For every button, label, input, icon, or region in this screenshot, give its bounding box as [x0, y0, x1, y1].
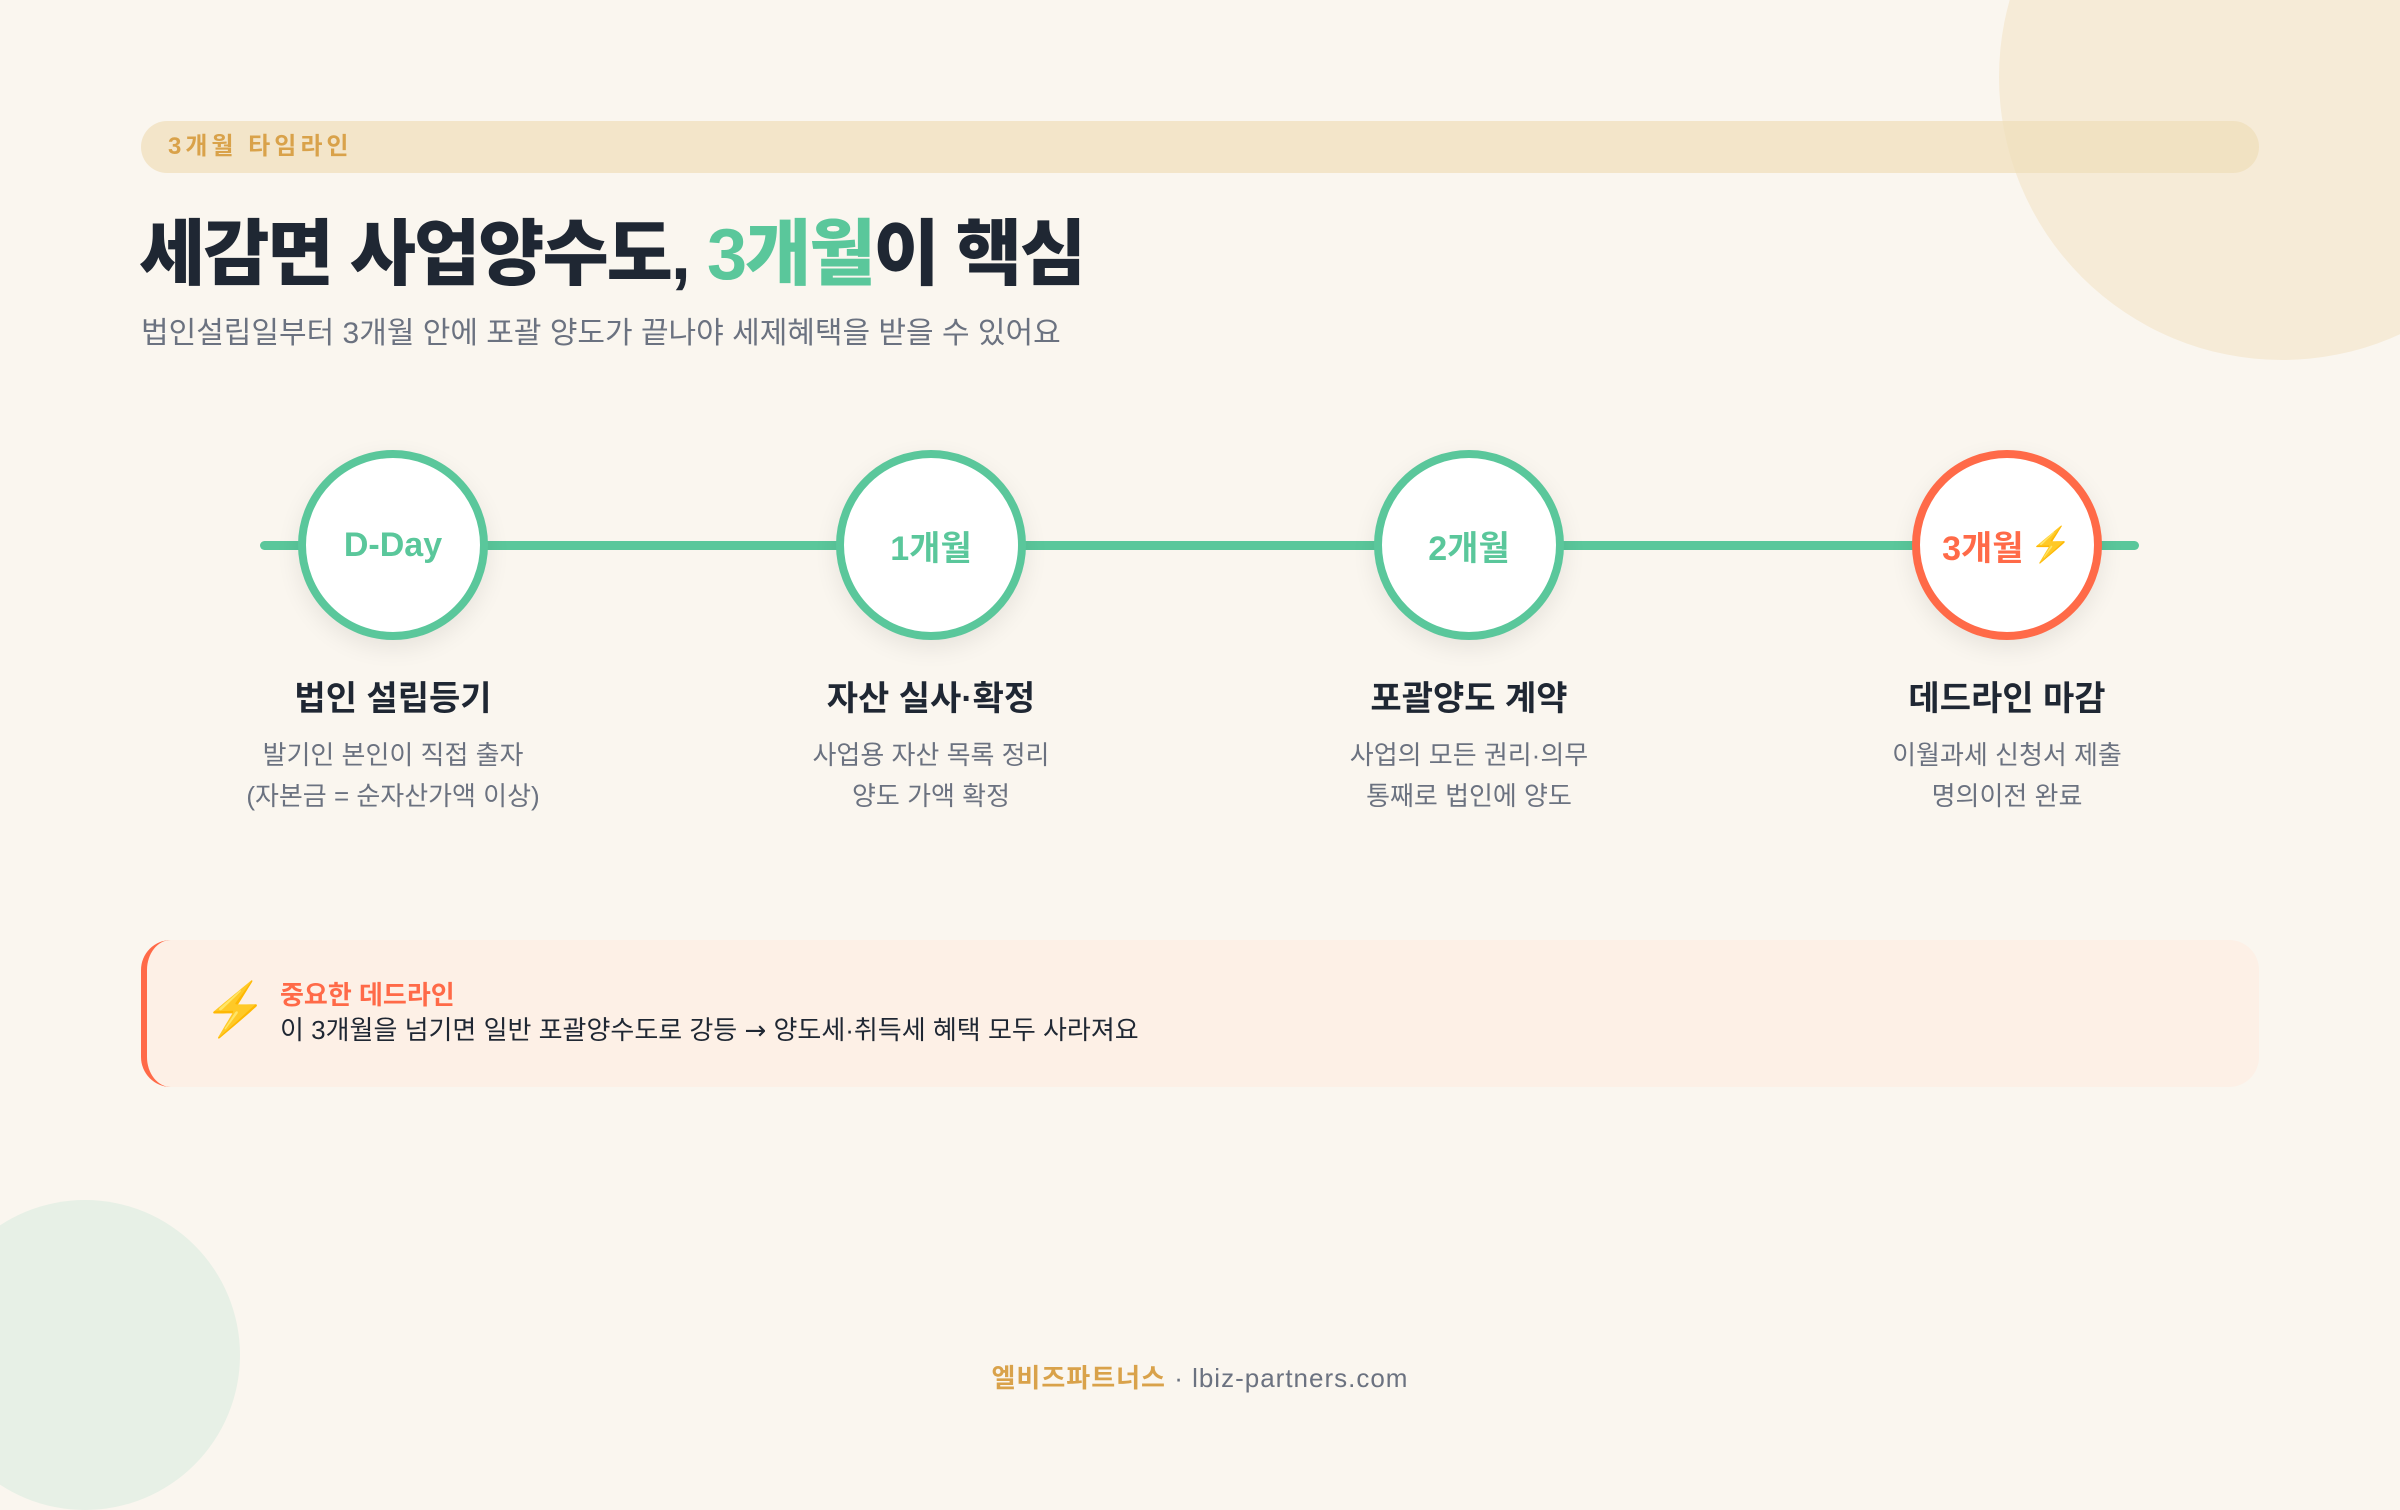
step: 1개월: 1개월	[890, 530, 972, 568]
label: 포괄양도 계약: 통째로 법인에 양도	[1366, 781, 1572, 811]
footer: 엘비즈파트너스 · lbiz-partners.com	[992, 1363, 1408, 1393]
step: 1개월	[836, 450, 1026, 640]
tag bar	[141, 121, 2259, 173]
label: 데드라인 마감	[1892, 680, 2122, 811]
callout text: 중요한 데드라인	[280, 980, 455, 1010]
callout	[141, 940, 2259, 1087]
label: 법인 설립등기: (자본금 = 순자산가액 이상)	[246, 781, 540, 811]
step: 3개월: ⚡	[2030, 526, 2072, 564]
subtitle: 법인설립일부터 3개월 안에 포괄 양도가 끝나야 세제혜택을 받을 수 있어요	[141, 317, 1061, 350]
label: 자산 실사·확정	[813, 680, 1049, 811]
label: 자산 실사·확정: 양도 가액 확정	[852, 781, 1010, 811]
step: 2개월	[1374, 450, 1564, 640]
label: 법인 설립등기: 발기인 본인이 직접 출자	[263, 740, 523, 770]
decorative circle bottom left	[0, 1200, 240, 1510]
step: 3개월	[1912, 450, 2102, 640]
label: 자산 실사·확정: 자산 실사·확정	[827, 680, 1035, 718]
step: D-Day: D-Day	[344, 526, 442, 564]
callout text	[280, 980, 1139, 1046]
icon: lightning: ⚡	[203, 981, 268, 1039]
decorative circle top right	[1999, 0, 2400, 360]
step: D-Day	[298, 450, 488, 640]
label: 법인 설립등기: 법인 설립등기	[294, 680, 492, 718]
label: 포괄양도 계약: 사업의 모든 권리·의무	[1350, 740, 1588, 770]
label: 데드라인 마감: 명의이전 완료	[1932, 781, 2082, 811]
label: 법인 설립등기	[246, 680, 540, 811]
title: 세감면 사업양수도, 3개월이 핵심	[139, 215, 1084, 295]
tag bar: 3개월 타임라인	[168, 133, 352, 160]
label: 포괄양도 계약	[1350, 680, 1588, 811]
timeline line	[260, 541, 2139, 550]
step: 2개월: 2개월	[1428, 530, 1510, 568]
step: 3개월: 3개월	[1942, 530, 2024, 568]
label: 자산 실사·확정: 사업용 자산 목록 정리	[813, 740, 1049, 770]
label: 데드라인 마감: 데드라인 마감	[1908, 680, 2106, 718]
label: 데드라인 마감: 이월과세 신청서 제출	[1892, 740, 2122, 770]
callout text: 이 3개월을 넘기면 일반 포괄양수도로 강등 → 양도세·취득세 혜택 모두 사라져요	[280, 1015, 1139, 1046]
label: 포괄양도 계약: 포괄양도 계약	[1370, 680, 1568, 718]
